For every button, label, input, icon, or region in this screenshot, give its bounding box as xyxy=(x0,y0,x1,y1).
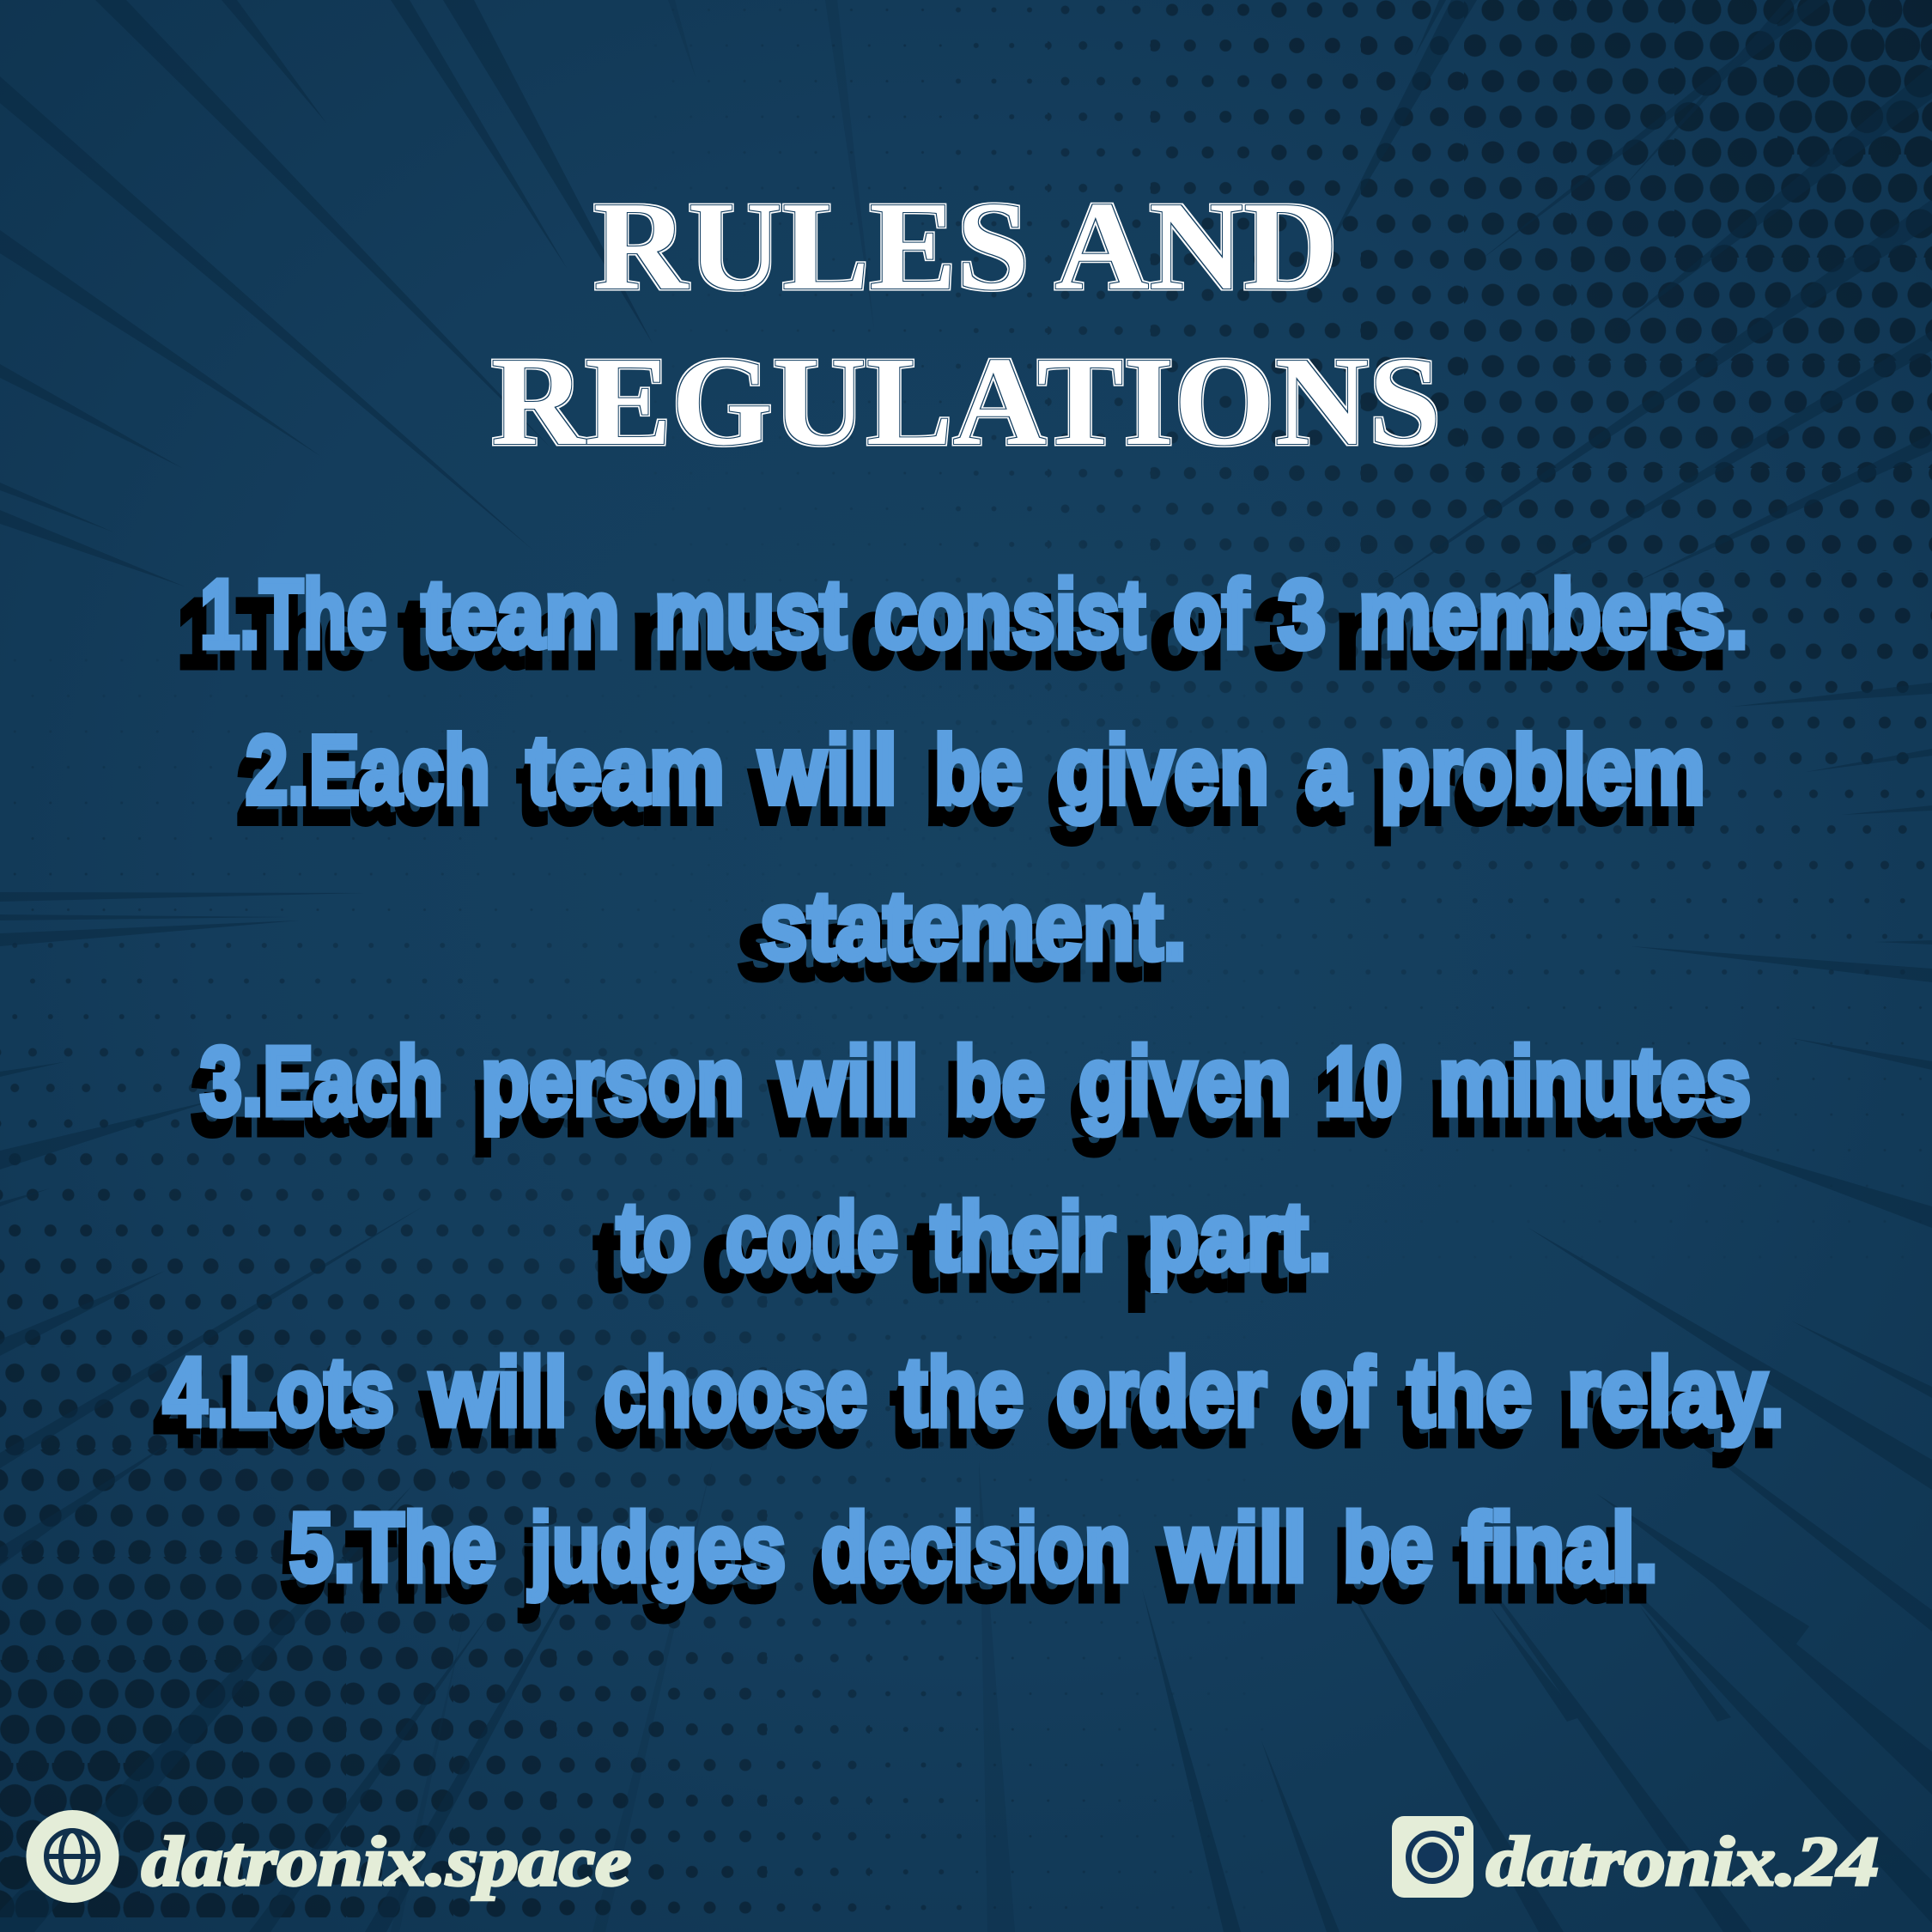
rule 5: judges xyxy=(528,1493,786,1601)
rule 2: be xyxy=(934,716,1023,824)
rule 5: 5.The xyxy=(289,1493,496,1601)
rule 4: the xyxy=(1407,1338,1532,1446)
rule 4: choose xyxy=(604,1338,867,1446)
rule 3: to xyxy=(617,1182,691,1291)
rules list xyxy=(163,560,1784,1601)
rule 2: given xyxy=(1056,716,1269,824)
rule 3: their xyxy=(931,1182,1115,1291)
rule 3: code xyxy=(726,1182,898,1291)
rule 1: consist xyxy=(874,560,1145,668)
rule 3: will xyxy=(778,1027,919,1135)
rule 2: will xyxy=(758,716,897,824)
rule 1: 1.The xyxy=(200,560,386,668)
rule 4: the xyxy=(900,1338,1024,1446)
rule 3: given xyxy=(1078,1027,1291,1135)
title xyxy=(491,176,1441,472)
rule 3: 10 xyxy=(1324,1027,1402,1135)
title: REGULATIONS xyxy=(491,331,1441,472)
rule 5: be xyxy=(1343,1493,1433,1601)
rule 1: 3 xyxy=(1278,560,1326,668)
rule 3 xyxy=(200,1027,1751,1291)
rule 5: will xyxy=(1166,1493,1307,1601)
rule 2 xyxy=(246,716,1705,980)
rule 3: 3.Each xyxy=(200,1027,443,1135)
website address: datronix.space xyxy=(142,1822,631,1900)
rule 2: statement. xyxy=(760,872,1187,980)
website footer xyxy=(26,1810,631,1903)
rule 5: final. xyxy=(1462,1493,1658,1601)
instagram footer xyxy=(1392,1816,1879,1900)
rule 4: order xyxy=(1056,1338,1267,1446)
rule 3: be xyxy=(954,1027,1045,1135)
rule 1: team xyxy=(422,560,620,668)
rule 1: of xyxy=(1173,560,1249,668)
rule 1: members. xyxy=(1358,560,1748,668)
rule 2: problem xyxy=(1380,716,1705,824)
rule 2: a xyxy=(1305,716,1352,824)
rule 4: will xyxy=(429,1338,568,1446)
rule 2: 2.Each xyxy=(246,716,490,824)
rule 3: person xyxy=(481,1027,744,1135)
instagram handle: datronix.24 xyxy=(1486,1822,1879,1900)
rule 5: decision xyxy=(821,1493,1131,1601)
rule 3: part. xyxy=(1147,1182,1332,1291)
rule 2: team xyxy=(526,716,725,824)
title: RULES AND xyxy=(593,176,1338,317)
icon: globe xyxy=(26,1810,118,1903)
rule 4: relay. xyxy=(1567,1338,1784,1446)
rule 4: 4.Lots xyxy=(163,1338,394,1446)
rule 1: must xyxy=(654,560,847,668)
rule 3: minutes xyxy=(1438,1027,1751,1135)
rule 4: of xyxy=(1300,1338,1375,1446)
icon: instagram camera xyxy=(1392,1816,1473,1898)
